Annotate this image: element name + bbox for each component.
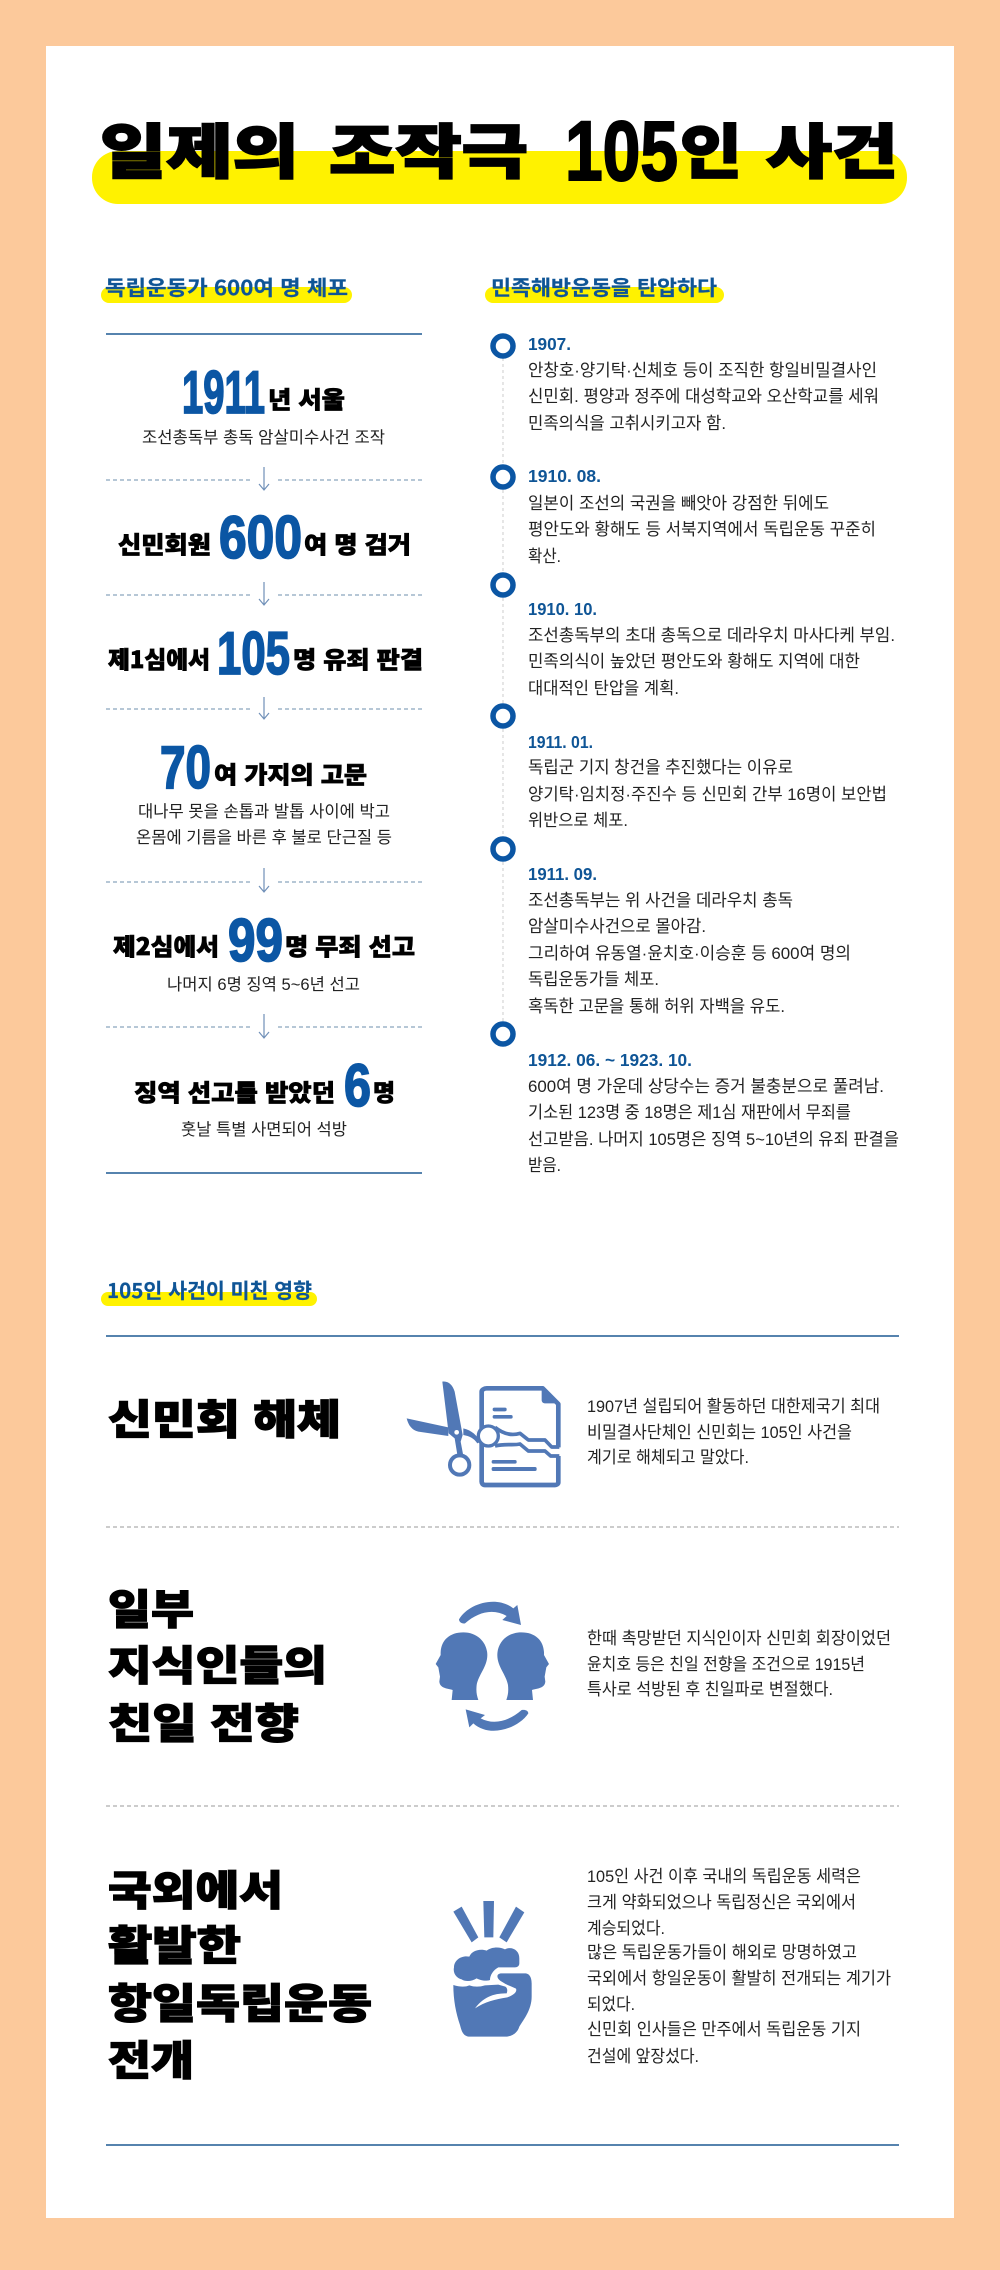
event 1912-1923: 선고받음. 나머지 105명은 징역 5~10년의 유죄 판결을 bbox=[528, 1130, 899, 1149]
step: 105 sentenced: 105 bbox=[217, 620, 290, 687]
event 1912-1923: 1912. 06. ~ 1923. 10. bbox=[528, 1050, 692, 1070]
text: 비밀결사단체인 신민회는 105인 사건을 bbox=[587, 1423, 852, 1442]
step: 6 imprisoned: 명 bbox=[373, 1074, 395, 1108]
step: 70 tortures: 대나무 못을 손톱과 발톱 사이에 박고 bbox=[138, 802, 390, 821]
text: 한때 촉망받던 지식인이자 신민회 회장이었던 bbox=[587, 1629, 891, 1648]
event 1911.01: 독립군 기지 창건을 추진했다는 이유로 bbox=[528, 758, 793, 777]
step: 1911 Seoul: 년 서울 bbox=[268, 381, 345, 415]
step: 600 arrested: 600 bbox=[219, 504, 302, 571]
step: 1911 Seoul bbox=[142, 359, 385, 447]
text: 특사로 석방된 후 친일파로 변절했다. bbox=[587, 1680, 833, 1699]
step: 105 sentenced bbox=[108, 620, 423, 687]
title: 사건 bbox=[766, 105, 898, 190]
event 1911.09: 그리하여 유동열·윤치호·이승훈 등 600여 명의 bbox=[528, 944, 851, 963]
heading: 국외에서 bbox=[108, 1857, 283, 1917]
panel: overseas movement bbox=[108, 1857, 891, 2087]
event 1910.08: 확산. bbox=[528, 547, 561, 566]
step: 99 acquitted: 제2심에서 bbox=[113, 928, 219, 962]
event 1910.08 bbox=[493, 466, 876, 566]
text: 크게 약화되었으나 독립정신은 국외에서 bbox=[587, 1893, 856, 1912]
step: 70 tortures: 온몸에 기름을 바른 후 불로 단근질 등 bbox=[136, 828, 392, 847]
step: 105 sentenced: 제1심에서 bbox=[108, 641, 210, 675]
heading bbox=[108, 1857, 372, 2087]
title: 조작극 bbox=[329, 105, 528, 190]
event 1907: 안창호·양기탁·신체호 등이 조직한 항일비밀결사인 bbox=[528, 361, 877, 380]
event 1911.09: 조선총독부는 위 사건을 데라우치 총독 bbox=[528, 891, 793, 910]
text: 많은 독립운동가들이 해외로 망명하였고 bbox=[587, 1943, 857, 1962]
text: 되었다. bbox=[587, 1995, 635, 2014]
panel: arrest flow bbox=[106, 359, 423, 1139]
event 1911.01: 양기탁·임치정·주진수 등 신민회 간부 16명이 보안법 bbox=[528, 785, 887, 804]
text: 윤치호 등은 친일 전향을 조건으로 1915년 bbox=[587, 1655, 865, 1674]
step: 1911 Seoul: 1911 bbox=[182, 359, 265, 426]
arrow bbox=[106, 1014, 422, 1038]
icon: scissors cutting document bbox=[407, 1382, 563, 1485]
event 1907: 민족의식을 고취시키고자 함. bbox=[528, 414, 726, 433]
event 1911.09: 혹독한 고문을 통해 허위 자백을 유도. bbox=[528, 997, 785, 1016]
icon: raised fist bbox=[453, 1901, 532, 2037]
step: 70 tortures: 여 가지의 고문 bbox=[214, 756, 367, 790]
title: 일제의 bbox=[100, 105, 299, 190]
heading: suppression: 민족해방운동을 탄압하다 bbox=[491, 271, 717, 301]
event 1907: 1907. bbox=[528, 334, 571, 354]
event 1911.01 bbox=[493, 706, 887, 830]
event 1911.09: 암살미수사건으로 몰아감. bbox=[528, 917, 706, 936]
step: 99 acquitted: 명 무죄 선고 bbox=[285, 928, 415, 962]
step: 70 tortures: 70 bbox=[160, 734, 211, 801]
title: 105 bbox=[565, 104, 678, 198]
event 1910.08: 평안도와 황해도 등 서북지역에서 독립운동 꾸준히 bbox=[528, 520, 876, 539]
heading: 지식인들의 bbox=[108, 1632, 327, 1692]
text: 신민회 인사들은 만주에서 독립운동 기지 bbox=[587, 2020, 861, 2039]
text: 계기로 해체되고 말았다. bbox=[587, 1448, 749, 1467]
event 1911.01: 위반으로 체포. bbox=[528, 811, 628, 830]
step: 600 arrested bbox=[118, 504, 411, 571]
event 1911.01: 1911. 01. bbox=[528, 732, 593, 752]
arrow bbox=[106, 697, 422, 719]
step: 6 imprisoned: 훗날 특별 사면되어 석방 bbox=[181, 1120, 347, 1139]
event 1910.10: 조선총독부의 초대 총독으로 데라우치 마사다케 부임. bbox=[528, 626, 895, 645]
heading: 일부 bbox=[108, 1576, 194, 1636]
step: 99 acquitted: 99 bbox=[228, 907, 283, 974]
arrow bbox=[106, 467, 422, 490]
arrow bbox=[106, 868, 422, 892]
heading: 신민회 해체 bbox=[108, 1386, 341, 1446]
event 1911.09: 독립운동가들 체포. bbox=[528, 970, 659, 989]
heading: influence: 105인 사건이 미친 영향 bbox=[107, 1274, 312, 1304]
heading: 전개 bbox=[108, 2027, 194, 2087]
step: 6 imprisoned: 6 bbox=[344, 1052, 371, 1119]
step: 105 sentenced: 명 유죄 판결 bbox=[293, 641, 423, 675]
text bbox=[587, 1629, 891, 1699]
title bbox=[92, 104, 907, 204]
step: 600 arrested: 신민회원 bbox=[118, 526, 211, 560]
event 1910.10: 대대적인 탄압을 계획. bbox=[528, 679, 679, 698]
event 1910.08: 1910. 08. bbox=[528, 466, 601, 486]
text: 국외에서 항일운동이 활발히 전개되는 계기가 bbox=[587, 1969, 891, 1988]
event 1907 bbox=[493, 334, 879, 433]
step: 6 imprisoned: 징역 선고를 받았던 bbox=[134, 1074, 335, 1108]
text bbox=[587, 1867, 891, 2066]
panel: pro-Japanese turn bbox=[108, 1576, 891, 1750]
event 1912-1923: 기소된 123명 중 18명은 제1심 재판에서 무죄를 bbox=[528, 1103, 851, 1122]
event 1910.10: 1910. 10. bbox=[528, 599, 597, 619]
heading: 항일독립운동 bbox=[108, 1970, 372, 2030]
icon: turning heads bbox=[436, 1602, 549, 1731]
event 1910.08: 일본이 조선의 국권을 빼앗아 강점한 뒤에도 bbox=[528, 494, 829, 513]
panel: dissolution bbox=[108, 1382, 880, 1485]
step: 99 acquitted: 나머지 6명 징역 5~6년 선고 bbox=[167, 975, 360, 994]
step: 6 imprisoned bbox=[134, 1052, 395, 1139]
text bbox=[587, 1397, 880, 1467]
heading: arrests: 독립운동가 600여 명 체포 bbox=[105, 271, 348, 301]
heading bbox=[108, 1576, 327, 1750]
text: 1907년 설립되어 활동하던 대한제국기 최대 bbox=[587, 1397, 880, 1416]
event 1911.09 bbox=[493, 839, 851, 1016]
step: 600 arrested: 여 명 검거 bbox=[304, 526, 411, 560]
event 1912-1923 bbox=[493, 1024, 899, 1175]
step: 1911 Seoul: 조선총독부 총독 암살미수사건 조작 bbox=[142, 428, 385, 447]
event 1907: 신민회. 평양과 정주에 대성학교와 오산학교를 세워 bbox=[528, 387, 879, 406]
heading: 활발한 bbox=[108, 1912, 241, 1972]
panel: timeline bbox=[493, 334, 899, 1175]
step: 99 acquitted bbox=[113, 907, 415, 994]
text: 건설에 앞장섰다. bbox=[587, 2047, 699, 2066]
text: 105인 사건 이후 국내의 독립운동 세력은 bbox=[587, 1867, 861, 1886]
arrow bbox=[106, 582, 422, 605]
text: 계승되었다. bbox=[587, 1919, 665, 1938]
heading: 친일 전향 bbox=[108, 1690, 299, 1750]
event 1910.10: 민족의식이 높았던 평안도와 황해도 지역에 대한 bbox=[528, 652, 860, 671]
event 1911.09: 1911. 09. bbox=[528, 864, 597, 884]
event 1912-1923: 받음. bbox=[528, 1156, 561, 1175]
event 1912-1923: 600여 명 가운데 상당수는 증거 불충분으로 풀려남. bbox=[528, 1077, 884, 1096]
step: 70 tortures bbox=[136, 734, 392, 847]
event 1910.10 bbox=[493, 575, 895, 698]
title: 인 bbox=[680, 105, 742, 190]
